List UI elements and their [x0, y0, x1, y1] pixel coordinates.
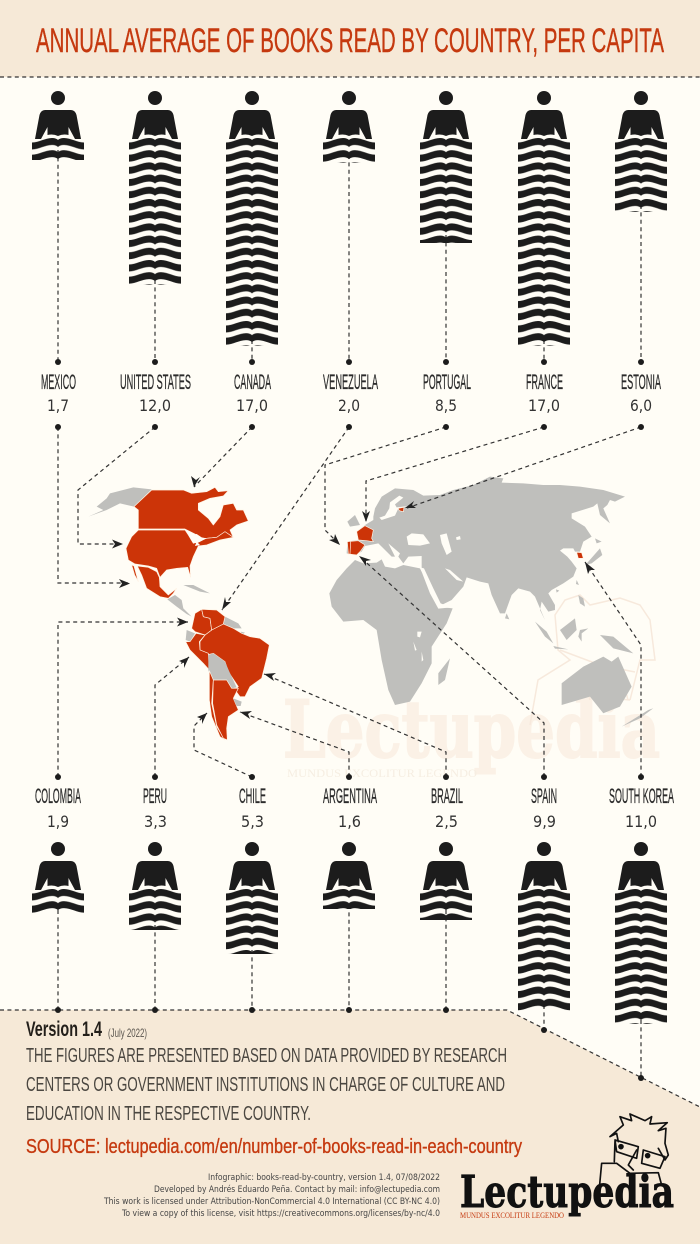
- credits: This work is licensed under Attribution-NonCommercial 4.0 International (CC BY-NC 4.0): [103, 1197, 440, 1207]
- source line: SOURCE: lectupedia.com/en/number-of-books-read-in-each-country: [26, 1136, 522, 1158]
- credits: To view a copy of this license, visit https://creativecommons.org/licenses/by-nc/4.0: [121, 1209, 440, 1219]
- column: Spain: SPAIN: [531, 785, 557, 808]
- column: Colombia: [32, 774, 84, 1013]
- column: Peru: PERU: [143, 785, 167, 808]
- column: United States: 12,0: [139, 396, 171, 415]
- column: France: [518, 91, 570, 430]
- map: Venezuela: [202, 609, 225, 630]
- header band: [0, 0, 700, 77]
- map: Brazil: [200, 624, 269, 697]
- map: Guianas: [223, 617, 245, 635]
- map: Spain and Portugal: [347, 541, 365, 555]
- watermark: Lectupedia: MUNDUS EXCOLITUR LEGENDO: [287, 766, 477, 780]
- world map: [88, 477, 653, 740]
- map: Peru: [186, 633, 209, 670]
- map: Estonia: [398, 507, 404, 512]
- column: Mexico: MEXICO: [41, 371, 76, 394]
- column: Mexico: 1,7: [47, 396, 69, 415]
- column: Peru: [129, 774, 181, 1013]
- map: Uruguay: [233, 698, 242, 706]
- column: Argentina: 1,6: [338, 812, 361, 831]
- column: Estonia: [615, 91, 667, 430]
- map: North and Central America: [88, 487, 248, 617]
- map: Argentina: [213, 680, 238, 740]
- description text: EDUCATION IN THE RESPECTIVE COUNTRY.: [26, 1103, 311, 1125]
- credits: Developed by Andrés Eduardo Peña. Contact by mail: info@lectupedia.com: [154, 1184, 440, 1195]
- map: Colombia: [192, 609, 212, 635]
- column: Argentina: [323, 774, 377, 1013]
- column: Portugal: 8,5: [435, 396, 457, 415]
- text: ARGENTINA: [323, 785, 377, 808]
- map: Canada: [134, 487, 248, 540]
- column: France: 17,0: [528, 396, 560, 415]
- column: Portugal: [420, 91, 472, 430]
- map: South Korea: [577, 552, 583, 558]
- arrows: connectors to map: [58, 427, 641, 777]
- column: Brazil: [420, 774, 472, 1013]
- column: Canada: [226, 91, 278, 430]
- map: Alaska: [88, 487, 152, 517]
- text: UNITED STATES: [120, 371, 191, 394]
- footer panel: [0, 1010, 700, 1244]
- map: Central America and Caribbean: [167, 585, 210, 617]
- text: PORTUGAL: [423, 371, 471, 394]
- watermark: Lectupedia: [283, 595, 660, 780]
- description text: [26, 1045, 507, 1125]
- column: Venezuela: [323, 91, 378, 430]
- column: Colombia: 1,9: [47, 812, 69, 831]
- map: United States: [126, 530, 233, 577]
- text: VENEZUELA: [323, 371, 378, 394]
- column: Mexico: [32, 91, 84, 430]
- map: Ecuador: [186, 630, 195, 642]
- column: South Korea: 11,0: [625, 812, 657, 831]
- icon: reader character: [599, 1114, 668, 1188]
- column: Canada: CANADA: [234, 371, 271, 394]
- map: Eurasia, Africa, Oceania: [329, 477, 653, 727]
- version heading: (July 2022): [108, 1026, 147, 1040]
- column: Brazil: 2,5: [435, 812, 458, 831]
- column: United States: [120, 91, 191, 430]
- column: Peru: 3,3: [144, 812, 167, 831]
- logo: Lectupedia: MUNDUS EXCOLITUR LEGENDO: [460, 1211, 564, 1220]
- column: Chile: [226, 774, 278, 1013]
- column: Canada: 17,0: [236, 396, 268, 415]
- version heading: Version 1.4: [26, 1018, 102, 1041]
- column: Venezuela: 2,0: [338, 396, 360, 415]
- column: France: FRANCE: [526, 371, 563, 394]
- column: Spain: 9,9: [533, 812, 556, 831]
- map: Bolivia and Paraguay: [208, 653, 237, 688]
- column: Spain: [518, 774, 570, 1033]
- map: Mexico: [132, 565, 177, 598]
- column: Brazil: BRAZIL: [431, 785, 463, 808]
- column: Estonia: 6,0: [630, 396, 652, 415]
- credits: Infographic: books-read-by-country, version 1.4, 07/08/2022: [208, 1173, 440, 1183]
- column: Chile: 5,3: [241, 812, 264, 831]
- map: South America: [186, 609, 269, 740]
- text: COLOMBIA: [35, 785, 81, 808]
- column: Chile: CHILE: [239, 785, 266, 808]
- column: South Korea: [609, 774, 674, 1081]
- map: France: [357, 526, 373, 542]
- credits: [103, 1173, 440, 1219]
- map: Chile: [209, 671, 225, 740]
- logo: Lectupedia: [460, 1114, 674, 1220]
